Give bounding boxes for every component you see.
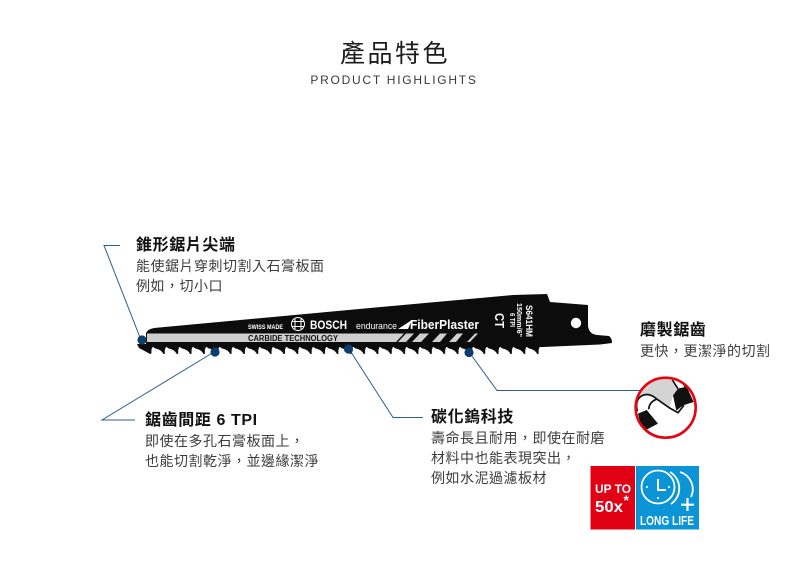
- blade label: swiss made: SWISS MADE: [248, 325, 283, 331]
- text block: carbide: 材料中也能表現突出，: [431, 450, 576, 466]
- carbide technology label: CARBIDE TECHNOLOGY: [248, 334, 339, 343]
- rotated model: S641HM: [523, 305, 534, 337]
- text block: ground teeth: [640, 321, 770, 359]
- text block: spacing: [145, 411, 319, 469]
- text block: ground teeth: 更快，更潔淨的切割: [640, 343, 770, 359]
- clock icon: [642, 470, 694, 511]
- callout line: tip: [104, 246, 141, 340]
- endurance: endurance: [356, 321, 397, 332]
- text block: ground teeth: 磨製鋸齒: [640, 322, 706, 339]
- callout dot: spacing: [210, 347, 220, 357]
- blade body: [137, 294, 612, 354]
- text block: carbide: 碳化鎢科技: [431, 409, 514, 426]
- blade teeth: [153, 345, 540, 356]
- title: 產品特色: [340, 40, 450, 68]
- bosch wordmark: BOSCH: [310, 318, 347, 332]
- text block: carbide: [431, 408, 605, 486]
- text block: carbide: 例如水泥過濾板材: [431, 470, 547, 486]
- callout line: spacing: [102, 352, 214, 420]
- mounting hole: [571, 318, 581, 328]
- text block: spacing: 鋸齒間距 6 TPI: [145, 412, 258, 429]
- callout dot: carbide: [344, 344, 353, 354]
- text block: tip: 例如，切小口: [136, 278, 223, 294]
- callout line: carbide: [349, 349, 423, 418]
- saw blade: [137, 294, 612, 356]
- callout line: ground teeth: [469, 352, 640, 390]
- callout dot: ground teeth: [464, 348, 474, 357]
- text block: spacing: 也能切割乾淨，並邊緣潔淨: [145, 453, 319, 469]
- rotated CT: CT: [492, 313, 507, 328]
- carbide stripe: [147, 334, 478, 342]
- rotated tpi: 6 TPI: [508, 313, 515, 327]
- rotated size: 150mm/6": [515, 303, 522, 337]
- red panel: [590, 466, 635, 530]
- badge text: 50x: 50x: [595, 499, 623, 516]
- subtitle: PRODUCT HIGHLIGHTS: [310, 73, 478, 87]
- fiberplaster: FiberPlaster: [410, 318, 479, 332]
- blue panel: [636, 466, 699, 530]
- text block: tip: 錐形鋸片尖端: [136, 237, 236, 254]
- text block: tip: [136, 236, 324, 294]
- badge text: up to: UP TO: [595, 484, 631, 496]
- icon: tooth magnifier: [634, 376, 697, 439]
- text block: spacing: 即使在多孔石膏板面上，: [145, 433, 304, 449]
- endurance mark: [398, 320, 412, 329]
- badge: up to 50x long life: [590, 466, 699, 530]
- callout dot: tip: [137, 335, 147, 345]
- bosch logo: [292, 318, 304, 330]
- text block: tip: 能使鋸片穿刺切割入石膏板面: [136, 258, 324, 274]
- text block: carbide: 壽命長且耐用，即使在耐磨: [431, 430, 605, 446]
- badge asterisk: *: [624, 492, 630, 508]
- clock ticks: [646, 486, 670, 499]
- badge text: long life: LONG LIFE: [640, 513, 694, 528]
- illustration canvas: [100, 245, 699, 530]
